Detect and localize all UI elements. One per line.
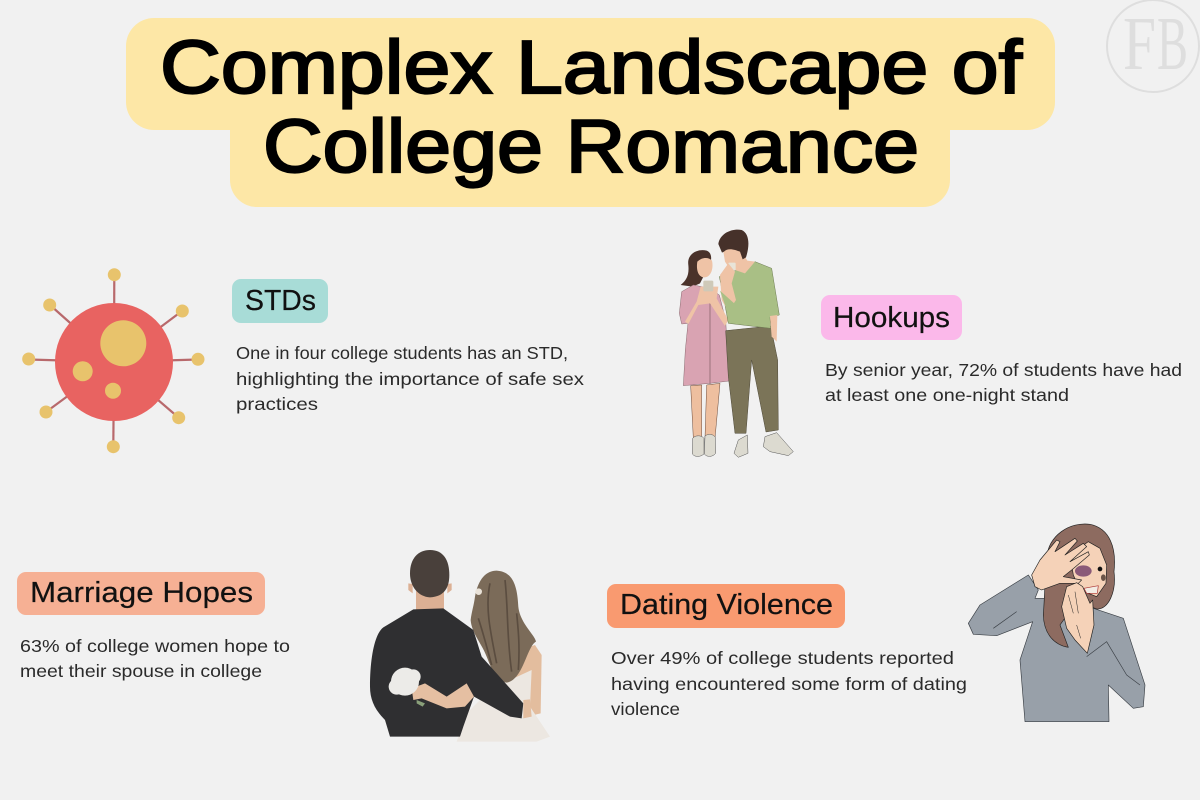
title: Complex Landscape of	[160, 25, 1022, 109]
text: Dating Violence stat	[611, 648, 967, 719]
text: Dating Violence stat: Over 49% of college students reported	[611, 648, 954, 668]
title	[126, 18, 1055, 207]
logo: FB monogram: F	[1123, 2, 1156, 86]
text: Dating Violence stat: having encountered some form of dating	[611, 674, 967, 694]
text: Marriage Hopes stat: meet their spouse in college	[20, 661, 262, 681]
label: STDs: STDs	[245, 285, 316, 317]
label: STDs	[232, 279, 328, 323]
label: Dating Violence: Dating Violence	[620, 589, 833, 621]
logo: FB monogram	[1107, 0, 1199, 92]
text: STDs stat: practices	[236, 394, 318, 414]
text: STDs stat	[236, 343, 584, 414]
text: Marriage Hopes stat: 63% of college women hope to	[20, 636, 290, 656]
label: Dating Violence	[607, 584, 845, 628]
illustration: wedding couple from behind	[370, 550, 550, 742]
label: Marriage Hopes	[17, 572, 265, 615]
panel: STDs	[22, 268, 584, 453]
text: STDs stat: highlighting the importance of safe sex	[236, 369, 584, 389]
text: Hookups stat: By senior year, 72% of students have had	[825, 360, 1182, 380]
panel: Hookups	[679, 230, 1182, 457]
text: STDs stat: One in four college students has an STD,	[236, 343, 568, 363]
text: Dating Violence stat: violence	[611, 699, 680, 719]
label: Hookups: Hookups	[833, 302, 950, 334]
text: Marriage Hopes stat	[20, 636, 290, 681]
illustration: couple with coffee	[679, 230, 793, 457]
text: Hookups stat	[825, 360, 1182, 405]
label: Hookups	[821, 295, 962, 340]
text: Hookups stat: at least one one-night stand	[825, 385, 1069, 405]
title: College Romance	[263, 104, 919, 188]
panel: Marriage Hopes	[17, 550, 550, 742]
label: Marriage Hopes: Marriage Hopes	[30, 577, 253, 609]
icon: virus	[22, 268, 205, 453]
panel: Dating Violence	[607, 524, 1145, 722]
illustration: woman shielding bruised face	[968, 524, 1145, 722]
